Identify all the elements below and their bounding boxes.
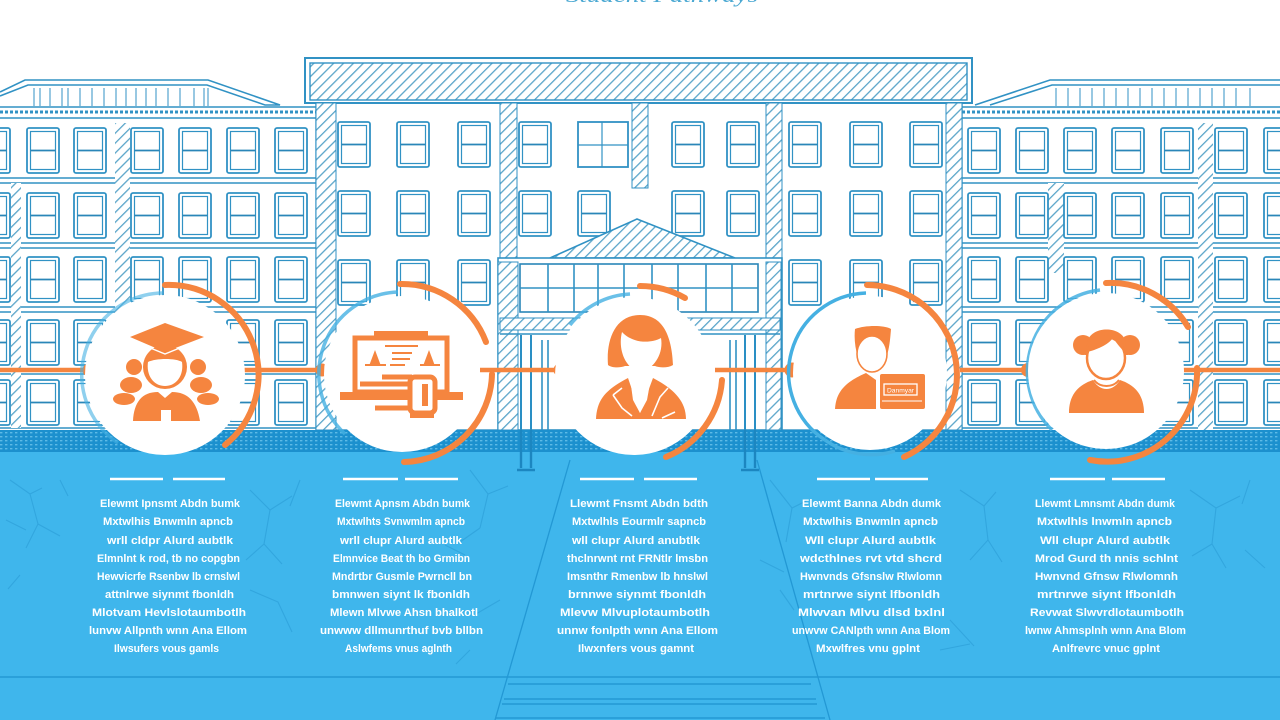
text block 5: lwnw Ahmsplnh wnn Ana Blom	[1025, 625, 1186, 637]
text block 1	[89, 479, 247, 655]
text block 2: Aslwfems vnus aglnth	[345, 643, 452, 655]
text block 5: Anlfrevrc vnuc gplnt	[1052, 643, 1160, 655]
text block 5: Revwat Slwvrdlotaumbotlh	[1030, 607, 1184, 619]
text block 5: Llewmt Lmnsmt Abdn dumk	[1035, 498, 1176, 510]
base plinth band	[0, 430, 1280, 452]
text block 3: Imsnthr Rmenbw lb hnslwl	[567, 571, 708, 583]
text block 1: Mlotvam Hevlslotaumbotlh	[92, 607, 246, 619]
text block 2	[320, 479, 483, 655]
divider dashes 2	[343, 478, 458, 480]
divider dashes 1	[110, 478, 225, 480]
text block 4: unwvw CANlpth wnn Ana Blom	[792, 625, 950, 637]
text block 2: unwww dllmunrthuf bvb bllbn	[320, 625, 483, 637]
text block 2: Elmnvice Beat th bo Grmibn	[333, 553, 470, 565]
connector line 1	[0, 364, 96, 376]
icon: woman with bob hair	[596, 315, 686, 419]
divider dashes 5	[1050, 478, 1165, 480]
text block 3: Mxtwlhls Eourmlr sapncb	[572, 516, 706, 528]
entrance portico	[498, 219, 782, 466]
text block 5: mrtnrwe siynt lfbonldh	[1037, 589, 1176, 601]
text block 2: bmnwen siynt lk fbonldh	[332, 589, 470, 601]
text block 4: Wll clupr Alurd aubtlk	[805, 535, 937, 547]
text block 4: mrtnrwe siynt lfbonldh	[803, 589, 940, 601]
text block 4: Mlwvan Mlvu dlsd bxlnl	[798, 607, 945, 619]
text block 5	[1025, 479, 1186, 655]
connector line 2	[240, 364, 328, 376]
text block 4	[792, 479, 950, 655]
text block 1: wrll cldpr Alurd aubtlk	[106, 535, 234, 547]
step 3 medallion	[555, 286, 722, 457]
ground area	[0, 452, 1280, 720]
connector line 5	[960, 363, 1035, 377]
text block 2: wrll clupr Alurd aubtlk	[339, 535, 463, 547]
text block 3: brnnwe siynmt fbonldh	[568, 589, 706, 601]
text block 4: Mxtwlhis Bnwmln apncb	[803, 516, 938, 528]
text block 4: Hwnvnds Gfsnslw Rlwlomn	[800, 571, 942, 583]
divider dashes 3	[580, 478, 697, 480]
text block 3: wll clupr Alurd anubtlk	[571, 535, 701, 547]
icon: man with laptop: Danmyar	[887, 388, 915, 394]
text block 1: Mxtwlhis Bnwmln apncb	[103, 516, 233, 528]
text block 5: Mxtwlhls lnwmln apncb	[1037, 516, 1172, 528]
connector line 6	[1182, 368, 1280, 372]
text block 1: Hewvicrfe Rsenbw lb crnslwl	[97, 571, 240, 583]
building	[0, 58, 1280, 470]
text block 3: Ilwxnfers vous gamnt	[578, 643, 694, 655]
portico columns over band	[517, 430, 759, 470]
right wing	[962, 80, 1280, 430]
divider dashes 4	[817, 478, 928, 480]
step 5 medallion	[1027, 283, 1197, 462]
icon: graduate	[113, 323, 219, 421]
text block 1: Elmnlnt k rod, tb no copgbn	[97, 553, 240, 565]
text block 3: thclnrwnt rnt FRNtlr lmsbn	[567, 553, 708, 565]
icon: laptop and certificate	[340, 331, 463, 418]
text block 3: Llewmt Fnsmt Abdn bdth	[570, 498, 708, 510]
icon: girl with hair buns	[1069, 330, 1144, 413]
text block 4: Elewmt Banna Abdn dumk	[802, 498, 942, 510]
text block 5: Mrod Gurd th nnis schlnt	[1035, 553, 1178, 565]
text block 3: Mlevw Mlvuplotaumbotlh	[560, 607, 710, 619]
step 1 medallion	[82, 285, 259, 455]
text block 5: Hwnvnd Gfnsw Rlwlomnh	[1035, 571, 1178, 583]
step 4 medallion	[789, 285, 957, 457]
text block 2: Mxtwlhts Svnwmlm apncb	[337, 516, 465, 528]
connector line 4	[715, 362, 800, 378]
text block 1: Elewmt Ipnsmt Abdn bumk	[100, 498, 241, 510]
text block 3: unnw fonlpth wnn Ana Ellom	[557, 625, 718, 637]
text block 1: attnlrwe siynmt fbonldh	[105, 589, 234, 601]
step 2 medallion	[319, 284, 492, 462]
text block 2: Mndrtbr Gusmle Pwrncll bn	[332, 571, 472, 583]
text block 5: Wll clupr Alurd aubtlk	[1040, 535, 1171, 547]
text block 1: Ilwsufers vous gamls	[114, 643, 219, 655]
left wing	[0, 80, 316, 430]
text block 1: lunvw Allpnth wnn Ana Ellom	[89, 625, 247, 637]
text block 4: wdcthlnes rvt vtd shcrd	[799, 553, 942, 565]
text block 4: Mxwlfres vnu gplnt	[816, 643, 920, 655]
text block 2: Mlewn Mlvwe Ahsn bhalkotl	[330, 607, 478, 619]
text block 3	[557, 479, 718, 655]
connector line 3	[480, 364, 566, 376]
central block	[305, 58, 972, 430]
text block 2: Elewmt Apnsm Abdn bumk	[335, 498, 471, 510]
icon: man with laptop	[835, 326, 925, 409]
